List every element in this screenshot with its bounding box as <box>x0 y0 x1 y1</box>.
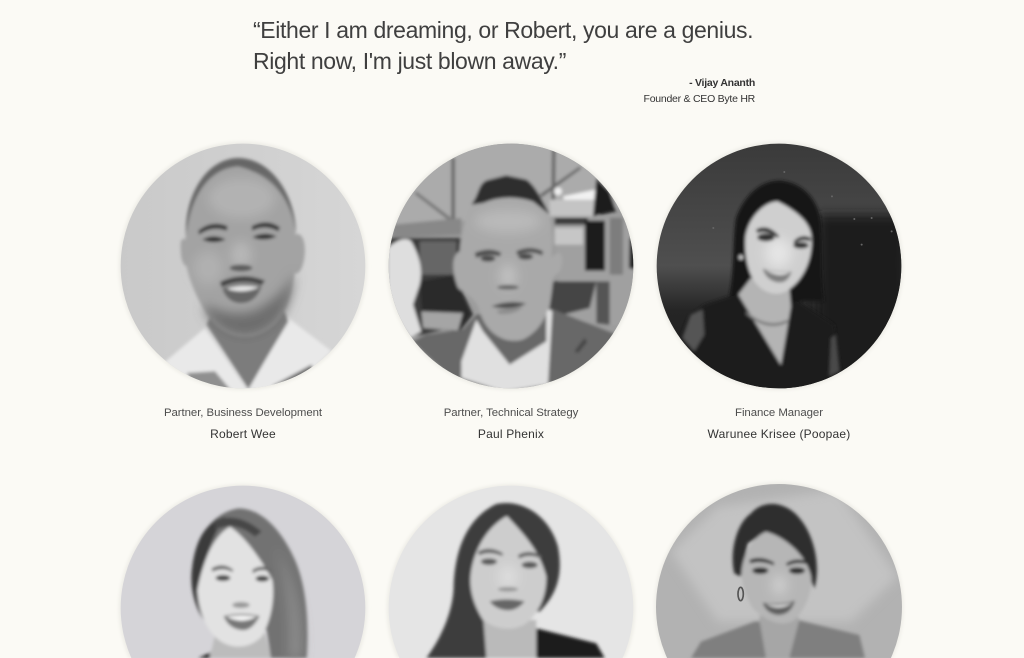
caption: Robert Wee: Partner, Business Development <box>164 407 322 419</box>
portrait: Warunee Krisee <box>655 142 908 395</box>
caption: Paul Phenix: Partner, Technical Strategy <box>444 407 578 419</box>
caption: Warunee Krisee <box>708 407 850 441</box>
portrait: Robert Wee <box>119 142 367 391</box>
portrait: lower right woman <box>654 482 904 658</box>
portrait: lower middle woman <box>387 484 635 658</box>
quote attribution: Founder & CEO Byte HR <box>644 92 755 104</box>
portrait: lower left woman <box>119 484 367 658</box>
caption: Paul Phenix: Paul Phenix <box>478 427 544 441</box>
caption: Warunee Krisee: Warunee Krisee (Poopae) <box>708 427 850 441</box>
caption: Robert Wee: Robert Wee <box>210 427 276 441</box>
quote <box>253 17 753 74</box>
earring <box>738 587 743 601</box>
quote: Right now, I'm just blown away.” <box>253 48 566 74</box>
portrait: Paul Phenix <box>387 142 636 391</box>
quote: “Either I am dreaming, or Robert, you are a genius. <box>253 17 753 43</box>
caption: Warunee Krisee: Finance Manager <box>735 407 823 419</box>
caption: Robert Wee <box>164 407 322 441</box>
quote attribution <box>644 77 755 104</box>
caption: Paul Phenix <box>444 407 578 441</box>
quote attribution: - Vijay Ananth <box>689 77 755 89</box>
